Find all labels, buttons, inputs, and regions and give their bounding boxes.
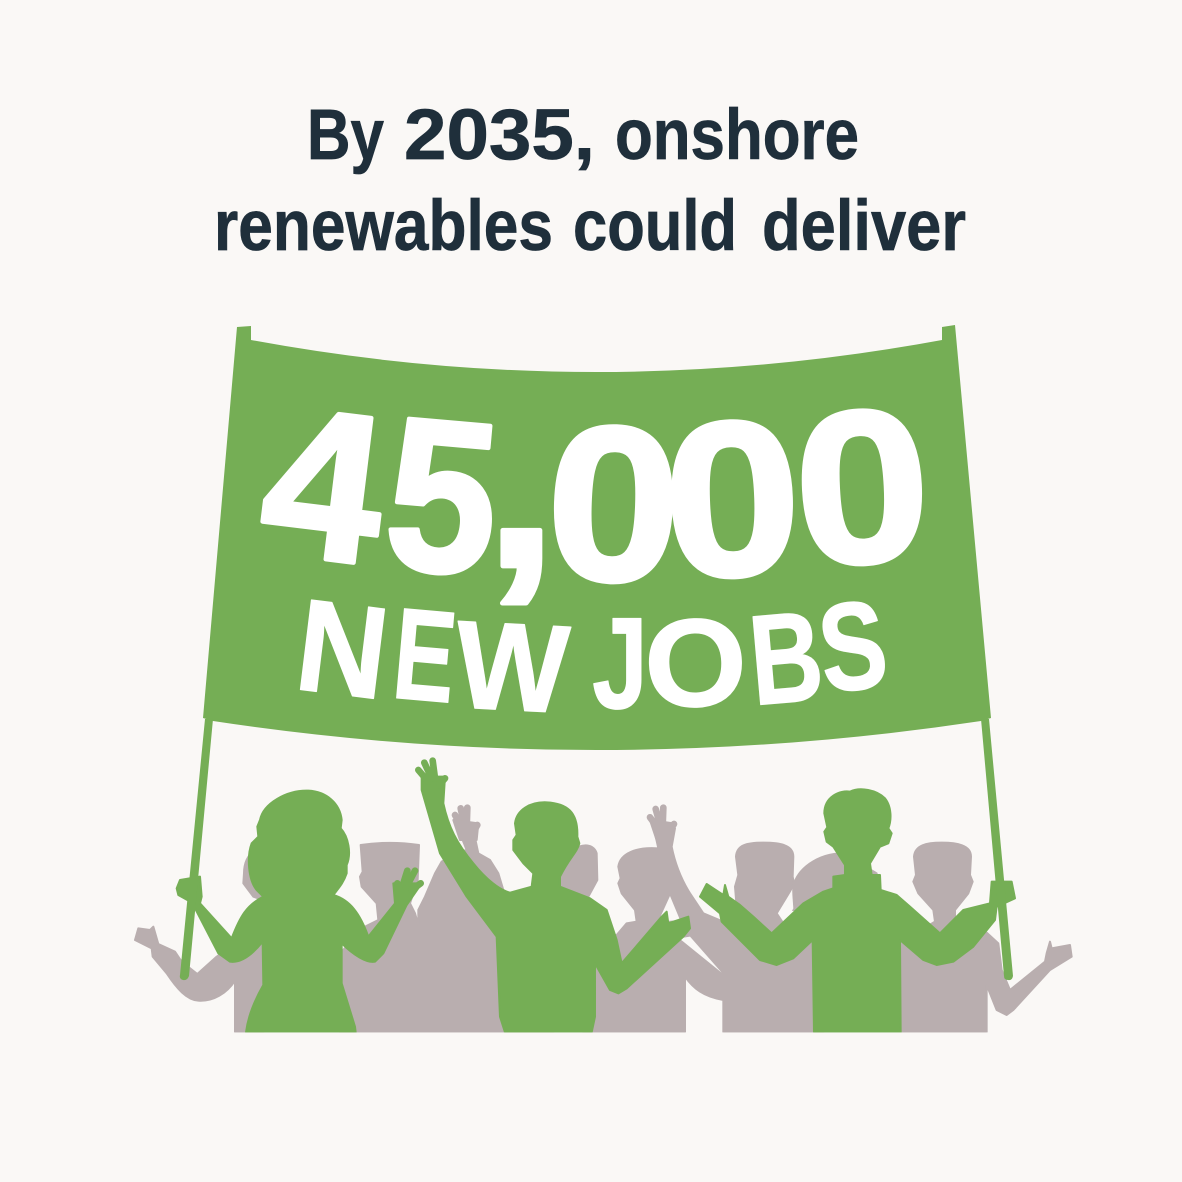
infographic [134, 106, 1073, 1032]
banner figure: 45,000: , [485, 350, 557, 618]
banner label: NEW JOBS: B [744, 585, 828, 733]
banner label: NEW JOBS: O [642, 592, 749, 735]
heading: renewables [214, 187, 553, 266]
green man holding pole [700, 789, 1015, 1032]
banner label: NEW JOBS: S [811, 573, 894, 719]
crowd illustration [135, 761, 1072, 1032]
heading: 2035, [404, 96, 595, 175]
banner figure: 45,000: 0 [789, 362, 936, 612]
banner label: NEW JOBS: E [388, 580, 462, 730]
grey crowd, left side [135, 808, 597, 1032]
heading: By [307, 96, 384, 175]
banner figure: 45,000 [250, 350, 936, 629]
heading: deliver [762, 187, 966, 266]
banner label: NEW JOBS: J [592, 590, 648, 736]
banner [203, 325, 991, 750]
banner label: NEW JOBS [289, 572, 894, 739]
banner figure: 45,000: 5 [377, 372, 508, 623]
banner figure: 45,000: 0 [660, 374, 805, 625]
banner figure: 45,000: 4 [250, 361, 398, 611]
grey person with thumb up, right [902, 843, 1072, 1032]
green woman [177, 791, 422, 1032]
heading: could [573, 187, 737, 266]
banner label: NEW JOBS: W [452, 594, 573, 739]
banner figure: 45,000: 0 [543, 379, 685, 629]
heading [214, 96, 966, 266]
green man waving [418, 761, 690, 1032]
banner label: NEW JOBS: N [289, 572, 396, 728]
heading: onshore [615, 96, 859, 175]
grey crowd, right side [583, 808, 1072, 1032]
banner poles [180, 719, 1013, 980]
grey raised-hand person and neighbour [583, 808, 877, 1032]
